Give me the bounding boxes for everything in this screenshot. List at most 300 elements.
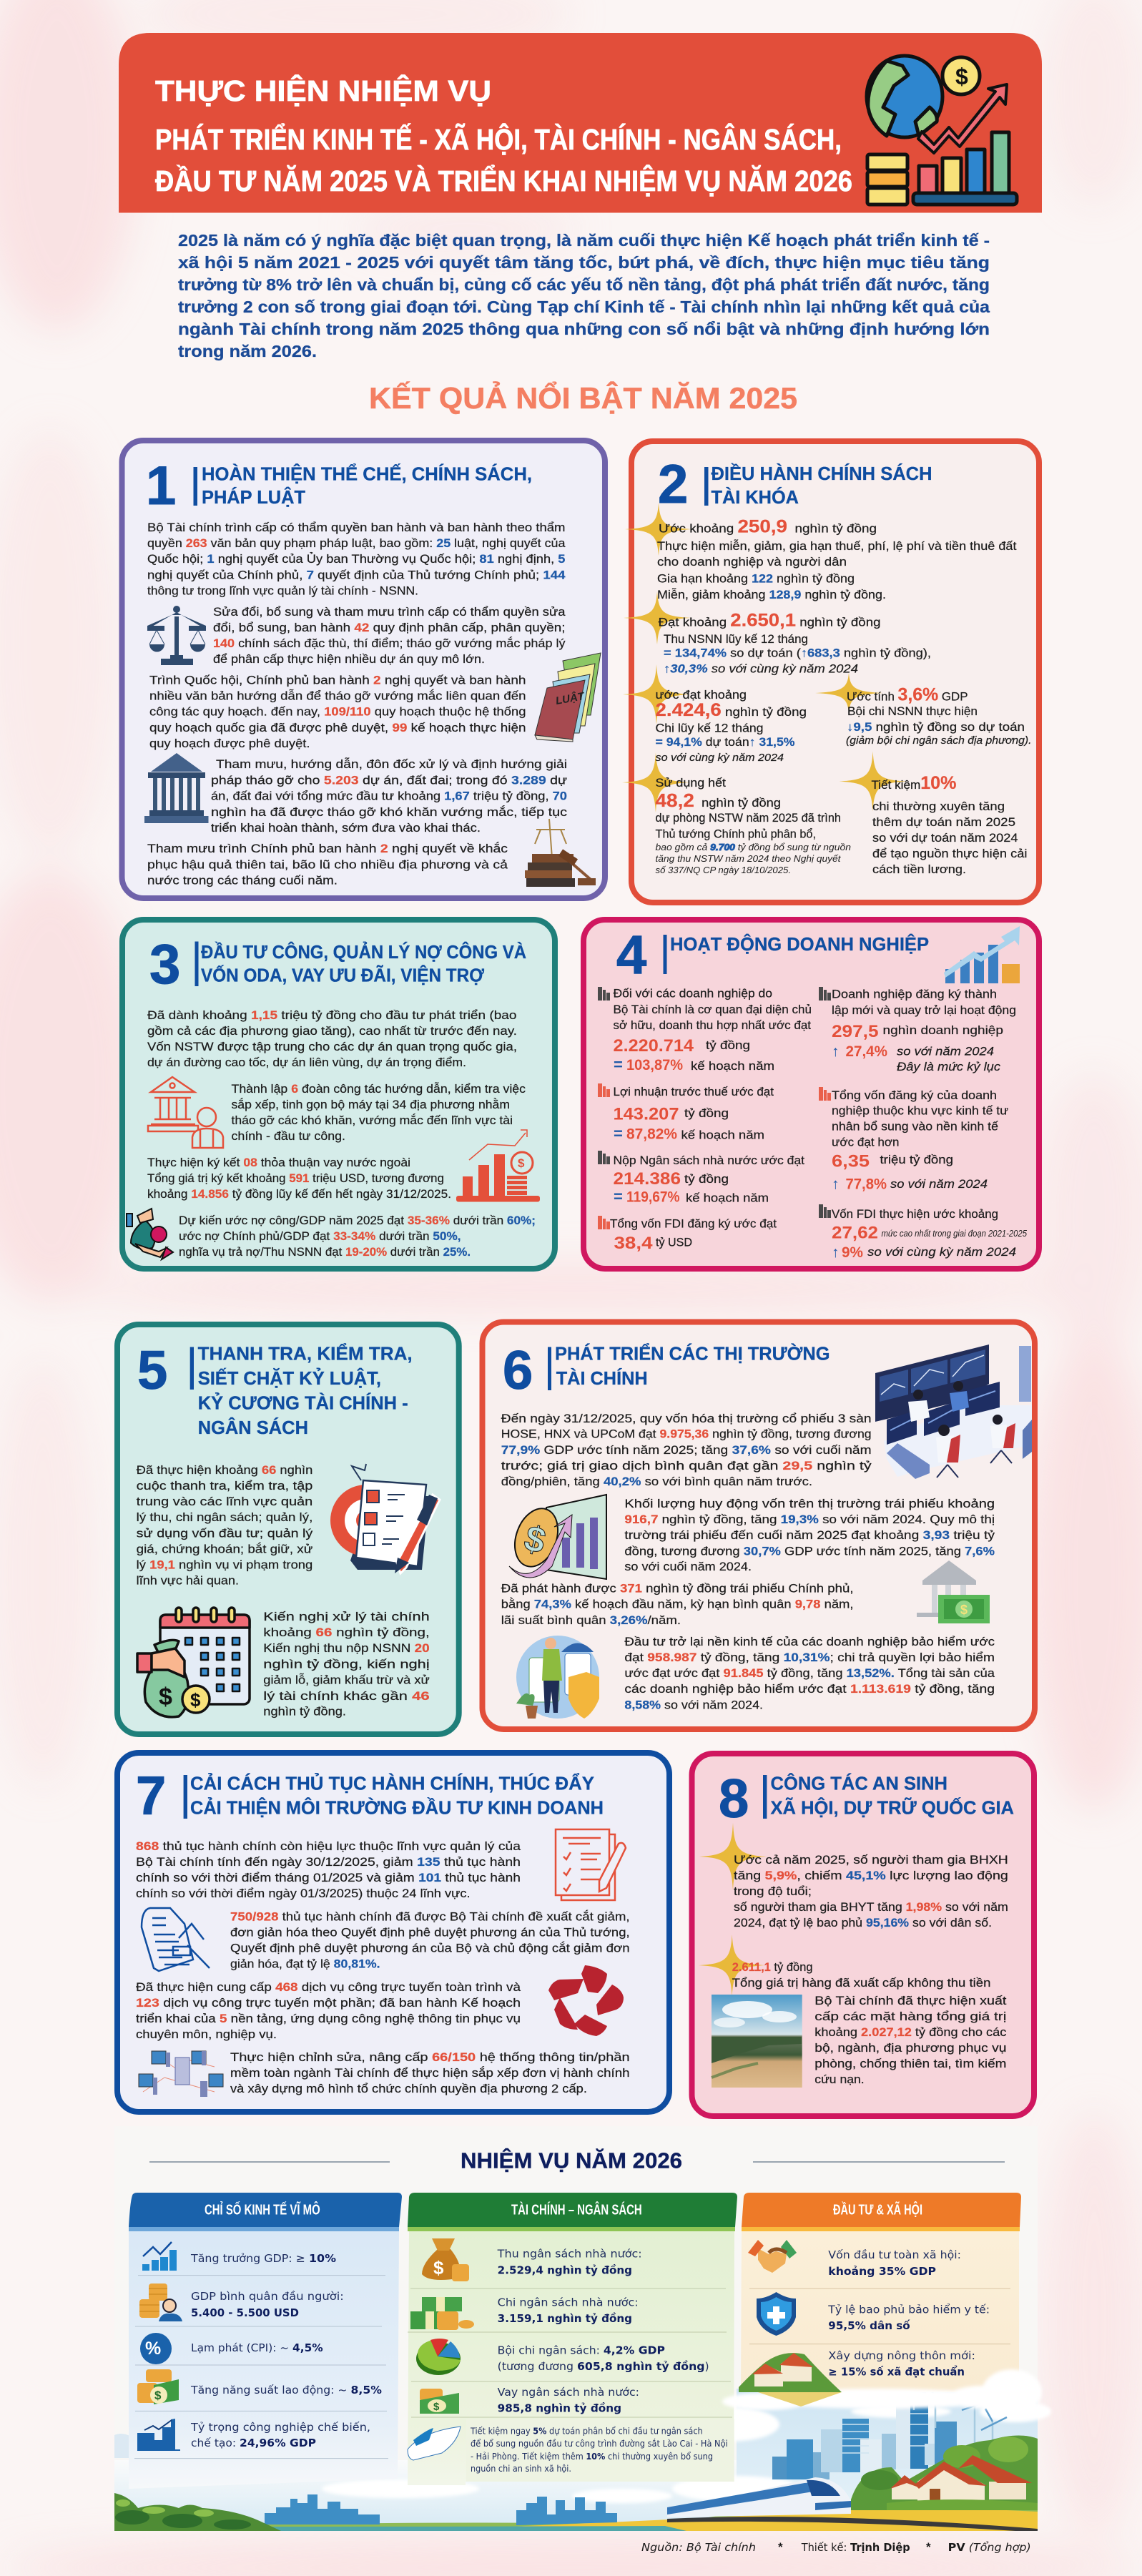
rows of budget figures: 2.529,4 nghìn tỷ đồng: [498, 2263, 632, 2277]
text: private capital: nhân bổ sung vào nền kinh tế: [832, 1120, 999, 1133]
trees and houses: [851, 2435, 1038, 2510]
panel 2: fiscal policy: [622, 441, 1039, 903]
icon: rising bar chart with coins: [944, 926, 1020, 983]
text: new businesses: Đây là mức kỷ lục: [897, 1060, 1001, 1073]
icon: percent: [140, 2333, 172, 2364]
number 2: 2: [658, 454, 688, 515]
text: online services: [136, 1980, 521, 2041]
text: savings: chi thường xuyên tăng: [872, 800, 1005, 813]
rows of investment targets: Vốn đầu tư toàn xã hội:: [828, 2248, 961, 2261]
panel 4: enterprises: [584, 920, 1039, 1269]
text: tax relief: Miễn, giảm khoảng 128,9 nghìn tỷ đồng.: [657, 588, 886, 601]
text: project unblocking: [211, 757, 568, 835]
text: financial recommendations: nghìn tỷ đồng.: [263, 1705, 346, 1719]
text: disbursed FDI: 9%: [842, 1244, 863, 1261]
scene: clouds, city, train and houses: [114, 2385, 1051, 2531]
text: state enterprises revenue: [598, 987, 812, 1073]
heading 8: CÔNG TÁC AN SINH: [771, 1773, 947, 1794]
text: government bonds: lãi suất bình quân 3,26% /năm.: [501, 1613, 681, 1627]
text: insurance participation: 2024, đạt tỷ lệ bao phủ 95,16% so với dân số.: [734, 1916, 992, 1929]
icon: chart with coins: $: [518, 1156, 525, 1170]
text: budget payment: [598, 1151, 804, 1206]
icon: calendar and money bag: [137, 1608, 250, 1717]
text: new businesses: [819, 987, 1016, 1073]
text: reserve goods issued: [814, 1994, 1007, 2086]
text: reserve goods value: [732, 1960, 990, 1990]
text: bond market: trường trái phiếu đến cuối năm 2025 đạt khoảng 3,93 triệu tỷ: [624, 1528, 995, 1542]
icon: village: [739, 2353, 842, 2407]
icon: bank and banknote: $: [960, 1603, 968, 1617]
text: tax relief: cho doanh nghiệp và người dân: [657, 555, 847, 569]
text: reserve goods issued: cấp các mặt hàng tổng giá trị: [814, 2010, 1006, 2023]
text: procedures in force: Bộ Tài chính tính đến ngày 30/12/2025, giảm 135 thủ tục hành: [136, 1855, 521, 1869]
text: reserve goods value: Tổng giá trị hàng đã xuất cấp không thu tiền: [732, 1976, 990, 1990]
text: profit: 143.207: [614, 1104, 679, 1124]
number 3: 3: [149, 933, 180, 996]
text: foreign loans: Thực hiện ký kết 08 thỏa thuận vay nước ngoài: [147, 1156, 410, 1169]
text: state enterprises revenue: 2.220.714: [614, 1036, 694, 1056]
text: legal documents: thông tư trong lĩnh vực quản lý tài chính - NSNN.: [147, 584, 418, 598]
text: profit: tỷ đồng: [684, 1106, 729, 1120]
text: state spending: ước đạt khoảng: [655, 688, 747, 702]
text: inspections: lý thu, chi ngân sách; quản lý,: [137, 1510, 312, 1524]
text: private capital: 6,35: [832, 1151, 870, 1171]
photo: flooded landscape: [712, 1995, 802, 2088]
rows of indicators: Tăng năng suất lao động: ~ 8,5%: [190, 2384, 382, 2396]
section heading: key results 2025: KẾT QUẢ NỔI BẬT NĂM 2025: [369, 380, 797, 415]
rows of budget figures: Thu ngân sách nhà nước:: [497, 2248, 642, 2261]
icon: coins and cash: $: [154, 2389, 162, 2402]
number 7: 7: [136, 1766, 166, 1827]
text: budget deficit: [846, 685, 1031, 747]
number 8: 8: [719, 1769, 749, 1829]
text: budget payment: 119,67%: [626, 1189, 680, 1206]
heading 3: [201, 941, 526, 985]
icon: chart with coins: [456, 1130, 540, 1201]
column: investment and society: [722, 2193, 1042, 2415]
ground and fields: [257, 2499, 1038, 2531]
column title: TÀI CHÍNH – NGÂN SÁCH: [511, 2201, 642, 2218]
text: private capital: [819, 1087, 1008, 1193]
text: planning resolutions: quy hoạch quốc gia đã được phê duyệt, 99 kế hoạch thực hiện: [149, 721, 526, 734]
text: state enterprises revenue: 103,87%: [626, 1057, 683, 1073]
text: disbursed FDI: [819, 1204, 1027, 1261]
credits footer: Thiết kế: Trịnh Diệp: [801, 2541, 910, 2554]
text: procedures in force: 868 thủ tục hành chính còn hiệu lực thuộc lĩnh vực quản lý của: [136, 1839, 521, 1853]
text: stock market: Đến ngày 31/12/2025, quy vốn hóa thị trường cổ phiếu 3 sàn: [501, 1412, 872, 1425]
icon: cash and coins: $: [433, 2401, 440, 2413]
intro paragraph: xã hội 5 năm 2021 - 2025 với quyết tâm tăng tốc, bứt phá, về đích, thực hiện mục tiêu tăng: [178, 253, 990, 272]
text: new businesses: lập mới và quay trở lại hoạt động: [832, 1003, 1016, 1017]
text: budget reserve: bao gồm cả 9.700 tỷ đồng bổ sung từ nguồn: [655, 842, 851, 852]
heading 2: ĐIỀU HÀNH CHÍNH SÁCH: [711, 463, 932, 484]
text: cut procedures: giản hóa, đạt tỷ lệ 80,81%.: [230, 1957, 380, 1971]
heading 5: KỶ CƯƠNG TÀI CHÍNH -: [198, 1392, 408, 1413]
heading 2: TÀI KHÓA: [711, 486, 799, 508]
panel 8: social security and reserves: [692, 1754, 1034, 2116]
icon: calendar and money bag: $: [159, 1683, 172, 1711]
icon: coins and cash: [137, 2369, 179, 2404]
text: budget deficit: (giảm bội chi ngân sách địa phương).: [846, 734, 1031, 747]
rows of indicators: GDP bình quân đầu người:: [191, 2290, 344, 2303]
text: state enterprises revenue: =: [614, 1056, 623, 1073]
icon: insurance adviser: [516, 1636, 599, 1719]
text: new businesses: ↑: [832, 1043, 840, 1060]
text: private capital: ước đạt hơn: [832, 1136, 900, 1149]
text: insurance participation: số người tham gia BHYT tăng 1,98% so với năm: [734, 1900, 1008, 1914]
text: online services: Đã thực hiện cung cấp 468 dịch vụ công trực tuyến toàn trình và: [136, 1980, 521, 1994]
text: legal documents: [147, 521, 566, 598]
icon: money bag: [422, 2238, 469, 2281]
title: [155, 74, 852, 197]
text: project unblocking: án, đất đai với tổng mức đầu tư khoảng 1,67 triệu tỷ đồng, 70: [211, 790, 567, 802]
text: project unblocking: nghìn ha đã được tháo gỡ khó khăn vướng mắc, tiếp tục: [211, 805, 568, 819]
credits footer: [641, 2540, 1031, 2554]
icon: star of hands: [548, 1965, 624, 2036]
panel: tasks for 2026: [114, 2126, 1051, 2531]
icon: coin and chart: $: [520, 1518, 550, 1561]
heading 6: [555, 1343, 830, 1389]
text: financial recommendations: giảm lỗ, giảm khấu trừ và xử: [263, 1673, 430, 1687]
text: stock market: 77,9% GDP ước tính năm 2025; tăng 37,6% so với cuối năm: [501, 1443, 872, 1457]
text: IT systems: mềm toàn ngành Tài chính để thực hiện sắp xếp đơn vị hành chính: [230, 2066, 630, 2080]
text: savings: Tiết kiệm10%: [871, 773, 957, 793]
text: state enterprises revenue: kế hoạch năm: [691, 1059, 774, 1073]
text: inspections: lĩnh vực hải quan.: [137, 1573, 239, 1587]
panel 3: public investment and debt: [122, 920, 555, 1269]
heading 5: SIẾT CHẶT KỶ LUẬT,: [198, 1367, 381, 1389]
heading 5: [198, 1343, 413, 1438]
credits footer: PV (Tổng hợp): [948, 2541, 1031, 2554]
text: legal documents: Quốc hội; 1 nghị quyết của Ủy ban Thường vụ Quốc hội; 81 nghị định, 5: [147, 552, 565, 566]
text: decentralisation rules: 140 chính sách đặc thù, thí điểm; tháo gỡ vướng mắc pháp lý: [213, 636, 566, 650]
column: macro indicators: [129, 2193, 402, 2489]
heading 6: PHÁT TRIỂN CÁC THỊ TRƯỜNG: [555, 1343, 830, 1365]
text: online services: 123 dịch vụ công trực tuyến một phần; đã ban hành Kế hoạch: [136, 1996, 521, 2010]
text: new businesses: 27,4%: [845, 1043, 887, 1060]
rows of budget figures: Bội chi ngân sách: 4,2% GDP: [498, 2344, 665, 2356]
text: profit: =: [614, 1124, 623, 1143]
text: budget reserve: tăng thu NSTW năm 2024 theo Nghị quyết: [655, 853, 842, 864]
text: state spending: 2.424,6 nghìn tỷ đồng: [655, 700, 807, 720]
text: task forces: tháo gỡ các khó khăn, vướng mắc đến lĩnh vực tài: [232, 1114, 513, 1127]
text: registered FDI: Tổng vốn FDI đăng ký ước đạt: [610, 1217, 777, 1230]
text: budget reserve: dự phòng NSTW năm 2025 đã trình: [655, 811, 841, 825]
panel 1: institutions and law: [122, 441, 605, 898]
text: savings: để tạo nguồn thực hiện cải: [872, 847, 1027, 860]
text: insurance participation: trong độ tuổi;: [734, 1884, 812, 1898]
text: state enterprises revenue: Đối với các doanh nghiệp do: [614, 987, 772, 1000]
text: insurance participation: Ước cả năm 2025, số người tham gia BHXH: [734, 1853, 1008, 1867]
text: cut procedures: Quyết định phê duyệt phương án của Bộ và chủ động cắt giảm đơn: [230, 1942, 630, 1955]
text: development investment: Đã dành khoảng 1,15 triệu tỷ đồng cho đầu tư phát triển (bao: [147, 1008, 516, 1022]
intro paragraph: trưởng 2 con số trong giai đoạn tới. Cùng Tạp chí Kinh tế - Tài chính nhìn lại những kết quả của: [178, 298, 990, 316]
intro paragraph: trong năm 2026.: [178, 342, 317, 360]
credits footer: *: [778, 2540, 783, 2554]
train and rails: [667, 2477, 1038, 2531]
text: disbursed FDI: ↑: [832, 1244, 840, 1261]
heading 4: HOẠT ĐỘNG DOANH NGHIỆP: [670, 933, 929, 955]
text: inspections: lý 19,1 nghìn vụ vi phạm trong: [137, 1558, 312, 1572]
text: task forces: sắp xếp, tinh gọn bộ máy tại 34 địa phương nhằm: [232, 1098, 510, 1111]
text: disaster recovery: nước trong các tháng cuối năm.: [147, 874, 338, 887]
text: financial recommendations: lý tài chính khác gần 46: [263, 1689, 430, 1703]
icon: law book: [535, 653, 601, 742]
text: task forces: [232, 1082, 526, 1143]
text: financial recommendations: [263, 1610, 430, 1719]
text: procedures in force: chính so với thời điểm ngày 01/3/2025) thuộc 24 lĩnh vực.: [136, 1887, 471, 1900]
text: government bonds: Đã phát hành được 371 nghìn tỷ đồng trái phiếu Chính phủ,: [501, 1582, 854, 1595]
text: new businesses: so với năm 2024: [897, 1044, 994, 1058]
text: tax relief: [657, 516, 1017, 601]
heading 6: TÀI CHÍNH: [556, 1367, 648, 1389]
text: inspections: sử dụng vốn đầu tư; quản lý: [137, 1527, 313, 1540]
text: insurance: Đầu tư trở lại nền kinh tế của các doanh nghiệp bảo hiểm ước: [624, 1635, 995, 1648]
text: foreign loans: khoảng 14.856 tỷ đồng lũy kế đến hết ngày 31/12/2025.: [147, 1187, 451, 1201]
panel 7: administrative reform: [117, 1753, 669, 2112]
text: government bonds: [501, 1582, 854, 1627]
text: insurance: đạt 958.987 tỷ đồng, tăng 10,31% ; chi trả quyền lợi bảo hiểm: [624, 1651, 995, 1664]
text: inspections: trung vào các lĩnh vực quản: [137, 1495, 312, 1508]
text: inspections: cuộc thanh tra, kiểm tra, tập: [137, 1479, 312, 1493]
text: legal documents: nghị quyết của Chính phủ, 7 quyết định của Thủ tướng Chính phủ; 144: [147, 568, 566, 582]
text: budget payment: Nộp Ngân sách nhà nước ước đạt: [614, 1154, 804, 1167]
text: state enterprises revenue: sở hữu, doanh thu hợp nhất ước đạt: [614, 1018, 811, 1032]
icon: globe, coin and rising bar chart: [867, 56, 1017, 205]
text: government bonds: bằng 74,3% kế hoạch đầu năm, kỳ hạn bình quân 9,78 năm,: [501, 1598, 854, 1611]
icon: document and gavel: [142, 1908, 210, 1971]
text: project unblocking: triển khai hoàn thành, sớm đưa vào khai thác.: [211, 821, 481, 835]
text: state spending: = 94,1% dự toán↑ 31,5%: [655, 735, 795, 749]
text: reserve goods issued: bộ, ngành, địa phương phục vụ: [814, 2041, 1006, 2055]
text: registered FDI: 38,4: [614, 1234, 653, 1253]
rows of indicators: Lạm phát (CPI): ~ 4,5%: [191, 2341, 323, 2354]
text: development investment: [147, 1008, 517, 1069]
rows of investment targets: Xây dựng nông thôn mới:: [828, 2349, 975, 2362]
text: budget reserve: Thủ tướng Chính phủ phân bổ,: [655, 827, 816, 841]
number 5: 5: [137, 1340, 167, 1401]
text: budget payment: kế hoạch năm: [686, 1191, 769, 1204]
text: disaster recovery: [147, 842, 508, 887]
text: state revenue: [658, 611, 931, 675]
column: finance and budget: [408, 2193, 737, 2485]
text: state spending: Chi lũy kế 12 tháng: [655, 721, 764, 735]
rows of indicators: Tỷ trọng công nghiệp chế biến,: [190, 2421, 370, 2434]
rows of investment targets: ≥ 15% số xã đạt chuẩn: [828, 2365, 965, 2379]
heading 8: XÃ HỘI, DỰ TRỮ QUỐC GIA: [771, 1797, 1014, 1819]
rows of investment targets: 95,5% dân số: [828, 2319, 910, 2332]
note: savings for railway: Tiết kiệm ngay 5% dự toán phân bổ chi đầu tư ngân sách: [470, 2426, 703, 2437]
text: financial recommendations: khoảng 66 nghìn tỷ đồng,: [263, 1626, 430, 1639]
buildings right: [772, 2385, 1007, 2479]
text: public debt: ước nợ Chính phủ/GDP đạt 33-34% dưới trần 50%,: [179, 1229, 461, 1243]
text: reserve goods issued: cứu nạn.: [814, 2073, 865, 2086]
text: online services: chuyên môn, nghiệp vụ.: [136, 2027, 277, 2041]
text: cut procedures: [230, 1910, 630, 1971]
text: savings: cách tiền lương.: [872, 862, 966, 876]
intro paragraph: [178, 231, 990, 360]
text: budget reserve: Sử dụng hết: [655, 776, 726, 790]
rows of investment targets: Tỷ lệ bao phủ bảo hiểm y tế:: [827, 2304, 990, 2316]
text: private capital: ↑: [832, 1176, 840, 1193]
text: registered FDI: [598, 1216, 777, 1253]
text: profit: [598, 1083, 774, 1143]
text: state enterprises revenue: tỷ đồng: [706, 1038, 750, 1052]
heading 7: [190, 1772, 604, 1819]
rows of budget figures: (tương đương 605,8 nghìn tỷ đồng): [498, 2359, 709, 2373]
note: savings for railway: để bổ sung nguồn đầu tư công trình đường sắt Lào Cai - Hà Nội: [471, 2438, 728, 2449]
sparkle stars: [699, 1823, 767, 1996]
text: inspections: giá, chứng khoán; bắt giữ, xử: [137, 1543, 312, 1556]
heading: tasks for 2026: NHIỆM VỤ NĂM 2026: [461, 2147, 682, 2173]
text: reserve goods issued: phòng, chống thiên tai, tìm kiếm: [814, 2057, 1006, 2070]
icon: factory: [137, 2419, 180, 2451]
heading 2: [711, 463, 932, 508]
title: THỰC HIỆN NHIỆM VỤ: [155, 74, 491, 107]
text: insurance: 8,58% so với năm 2024.: [624, 1698, 763, 1712]
text: state revenue: = 134,74% so dự toán ( ↑683,3 nghìn tỷ đồng),: [664, 647, 931, 659]
text: decentralisation rules: Sửa đổi, bổ sung và tham mưu trình cấp có thẩm quyền sửa: [213, 605, 566, 619]
intro paragraph: trưởng từ 8% trở lên và chuẩn bị, củng cố các yếu tố nền tảng, đột phá phát triển đất nước, tăng: [178, 275, 990, 294]
text: disaster recovery: phục hậu quả thiên tai, bão lũ cho nhiều địa phương và cả: [147, 858, 508, 871]
text: planning resolutions: quy hoạch được phê duyệt.: [149, 737, 310, 750]
rows of budget figures: 985,8 nghìn tỷ đồng: [498, 2402, 621, 2415]
title: ĐẦU TƯ NĂM 2025 VÀ TRIỂN KHAI NHIỆM VỤ NĂM 2026: [155, 164, 852, 197]
rows of indicators: [190, 2252, 382, 2449]
text: legal documents: Bộ Tài chính trình cấp có thẩm quyền ban hành và ban hành theo thẩm: [147, 521, 565, 534]
text: bond market: đồng, tương đương 30,7% GDP ước tính năm 2025, tăng 7,6%: [624, 1544, 995, 1558]
text: budget deficit: Bội chi NSNN thực hiện: [847, 704, 978, 718]
column title: CHỈ SỐ KINH TẾ VĨ MÔ: [205, 2201, 320, 2218]
heading 3: ĐẦU TƯ CÔNG, QUẢN LÝ NỢ CÔNG VÀ: [201, 941, 526, 963]
heading 1: [202, 463, 532, 508]
header banner: [119, 33, 1042, 213]
panel 5: inspection: [117, 1324, 459, 1734]
icon: handshake: [748, 2240, 797, 2273]
text: stock market: trước; giá trị giao dịch bình quân đạt gần 29,5 nghìn tỷ: [501, 1459, 872, 1473]
number 1: 1: [146, 456, 176, 516]
text: insurance participation: [734, 1853, 1008, 1929]
text: online services: triển khai của 5 nền tảng, ứng dụng công nghệ thông tin phục vụ: [136, 2012, 521, 2025]
text: project unblocking: Tham mưu, hướng dẫn, đôn đốc xử lý và định hướng giải: [216, 757, 567, 771]
icon: money bag: $: [433, 2257, 444, 2278]
icon: coins and person: [139, 2284, 182, 2321]
text: decentralisation rules: để phân cấp thực hiện nhiều dự án quy mô lớn.: [213, 652, 485, 666]
text: cut procedures: đơn giản hóa theo Quyết định phê duyệt phương án của Thủ tướng,: [230, 1926, 630, 1940]
text: development investment: gồm cả các địa phương giao tăng), cao nhất từ trước đến nay.: [147, 1024, 517, 1038]
text: budget reserve: [655, 776, 851, 875]
text: budget reserve: 48,2 nghìn tỷ đồng: [655, 790, 781, 811]
text: state revenue: ↑30,3% so với cùng kỳ năm 2024: [664, 662, 858, 675]
text: private capital: Tổng vốn đăng ký của doanh: [832, 1088, 997, 1102]
number 4: 4: [616, 925, 646, 985]
text: state revenue: Thu NSNN lũy kế 12 tháng: [664, 632, 808, 646]
text: savings: [871, 773, 1027, 876]
icon: debt hand: [127, 1209, 173, 1259]
text: IT systems: [230, 2050, 630, 2095]
icon: scales: [147, 606, 206, 665]
text: budget payment: 214.386: [614, 1169, 681, 1189]
text: savings: thêm dự toán năm 2025: [872, 815, 1015, 829]
heading 7: CẢI CÁCH THỦ TỤC HÀNH CHÍNH, THÚC ĐẨY: [190, 1772, 594, 1794]
text: insurance: [624, 1635, 995, 1712]
text: disbursed FDI: mức cao nhất trong giai đoạn 2021-2025: [881, 1229, 1027, 1239]
icon: globe, coin and rising bar chart: $: [955, 64, 968, 89]
text: task forces: Thành lập 6 đoàn công tác hướng dẫn, kiểm tra việc: [232, 1082, 526, 1096]
text: profit: kế hoạch năm: [681, 1129, 764, 1141]
text: IT systems: và xây dựng mô hình tổ chức chính quyền địa phương 2 cấp.: [230, 2082, 587, 2095]
heading 1: HOÀN THIỆN THỂ CHẾ, CHÍNH SÁCH,: [202, 463, 532, 485]
text: state spending: so với cùng kỳ năm 2024: [655, 752, 784, 764]
text: registered FDI: tỷ USD: [656, 1236, 692, 1249]
sparkle stars: [622, 503, 907, 812]
text: savings: so với dự toán năm 2024: [872, 831, 1018, 845]
text: new businesses: 297,5: [832, 1022, 878, 1041]
icon: pie chart: [416, 2339, 461, 2375]
text: decentralisation rules: đổi, bổ sung, ban hành 42 quy định phân cấp, phân quyền;: [213, 621, 565, 634]
text: procedures in force: chính so với thời điểm tháng 01/2025 và giảm 101 thủ tục hành: [136, 1871, 521, 1884]
icon: temple: [144, 753, 209, 823]
heading 5: NGÂN SÁCH: [198, 1417, 308, 1438]
text: insurance: các doanh nghiệp bảo hiểm ước đạt 1.113.619 tỷ đồng, tăng: [624, 1682, 995, 1696]
text: private capital: triệu tỷ đồng: [880, 1153, 953, 1166]
text: budget payment: =: [614, 1187, 623, 1206]
icon: stacks of cash: [410, 2297, 474, 2330]
text: reserve goods issued: khoảng 2.027,12 tỷ đồng cho các: [814, 2025, 1007, 2039]
icon: document and pen: [556, 1829, 626, 1900]
text: development investment: dự án đường cao tốc, dự án liên vùng, dự án trọng điểm.: [147, 1056, 466, 1069]
credits footer: *: [926, 2540, 931, 2554]
text: planning resolutions: [149, 674, 526, 750]
text: planning resolutions: công tác quy hoạch. đến nay, 109/110 quy hoạch thuộc hệ thống: [149, 705, 526, 718]
text: disbursed FDI: Vốn FDI thực hiện ước khoảng: [832, 1207, 998, 1221]
icon: target and checklist: [330, 1464, 440, 1573]
text: stock market: HOSE, HNX và UPCoM đạt 9.975,36 nghìn tỷ đồng, tương đương: [501, 1427, 872, 1441]
heading 3: VỐN ODA, VAY ƯU ĐÃI, VIỆN TRỢ: [201, 964, 485, 985]
icon: cash and coins: [420, 2389, 459, 2414]
text: IT systems: Thực hiện chỉnh sửa, nâng cấp 66/150 hệ thống thông tin/phần: [230, 2050, 630, 2064]
rows of budget figures: [497, 2248, 709, 2415]
text: task forces: chính - đầu tư công.: [232, 1129, 345, 1143]
text: cut procedures: 750/928 thủ tục hành chính đã được Bộ Tài chính đề xuất cắt giảm,: [230, 1910, 630, 1924]
heading 5: THANH TRA, KIỂM TRA,: [198, 1343, 413, 1365]
intro paragraph: ngành Tài chính trong năm 2025 thông qua những con số nổi bật và những định hướng lớn: [178, 320, 990, 338]
text: budget deficit: Ước tính 3,6% GDP: [847, 685, 968, 705]
left trees and skyline: [114, 2493, 617, 2531]
text: budget reserve: số 337/NQ CP ngày 18/10/2025.: [655, 865, 791, 875]
text: insurance: ước đạt ước đạt 91.845 tỷ đồng, tăng 13,52%. Tổng tài sản của: [624, 1666, 995, 1680]
heading 7: CẢI THIỆN MÔI TRƯỜNG ĐẦU TƯ KINH DOANH: [190, 1797, 604, 1819]
text: bond market: [624, 1497, 995, 1573]
text: new businesses: nghìn doanh nghiệp: [882, 1023, 1003, 1037]
text: financial recommendations: nghìn tỷ đồng, kiến nghị: [263, 1658, 430, 1671]
text: development investment: Vốn NSTW được tập trung cho các dự án quan trọng quốc gia,: [147, 1040, 517, 1053]
text: state spending: [655, 688, 807, 764]
icon: growth chart: [142, 2242, 177, 2271]
icon: law book: LUẬT: [555, 689, 586, 707]
text: state revenue: Đạt khoảng 2.650,1 nghìn tỷ đồng: [658, 611, 881, 631]
text: disbursed FDI: so với cùng kỳ năm 2024: [867, 1245, 1016, 1259]
illustration: traders at monitors: [875, 1344, 1032, 1479]
rows of indicators: chế tạo: 24,96% GDP: [191, 2437, 316, 2449]
panel 6: financial markets: [482, 1322, 1035, 1729]
icon: coin and chart: [507, 1495, 606, 1579]
text: foreign loans: Tổng giá trị ký kết khoảng 591 triệu USD, tương đương: [147, 1171, 444, 1185]
note: savings for railway: [466, 2419, 734, 2482]
icon: server network: [139, 2051, 223, 2097]
text: stock market: đồng/phiên, tăng 40,2% so với bình quân năm trước.: [501, 1475, 812, 1488]
text: private capital: so với năm 2024: [890, 1177, 988, 1191]
